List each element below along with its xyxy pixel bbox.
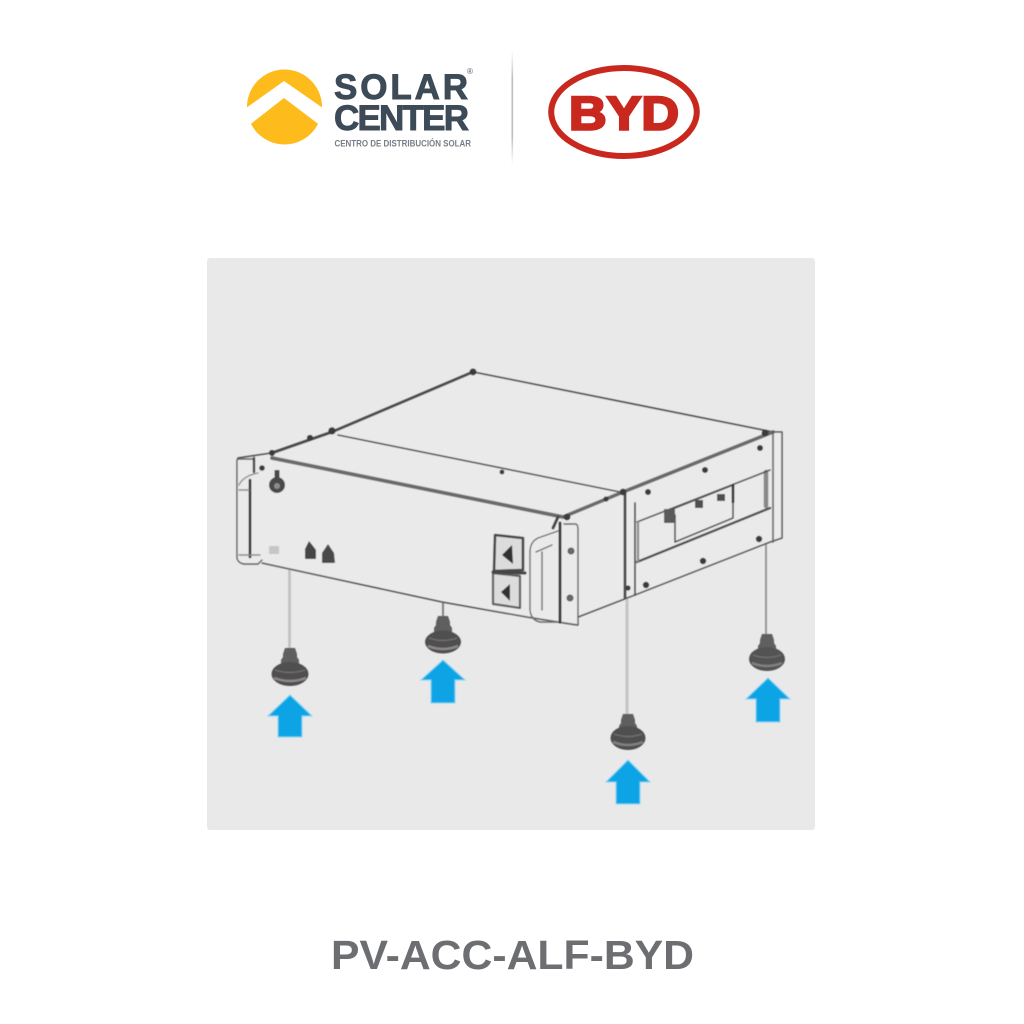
left handle (237, 458, 262, 564)
arrow 1 (268, 695, 312, 737)
foot 2 (425, 616, 461, 654)
red oval (551, 68, 697, 156)
illustration: battery module (237, 369, 782, 715)
arrow 2 (421, 660, 465, 703)
product code: PV-ACC-ALF-BYD (331, 932, 694, 978)
registered mark: ® (467, 67, 473, 76)
foot 3 (610, 714, 646, 750)
right handle (530, 523, 560, 622)
status label and ports (269, 541, 335, 563)
wordmark: SOLAR: SOLAR (334, 68, 468, 107)
fastening screws (259, 369, 768, 591)
logo: Solar Center (244, 67, 473, 148)
logo: BYD (551, 68, 697, 156)
tagline: CENTRO DE DISTRIBUCIÓN SOLAR (334, 138, 471, 148)
panel background (207, 258, 815, 830)
round connector (269, 470, 285, 493)
box body (237, 372, 782, 625)
arrow 4 (746, 678, 790, 722)
wordmark: CENTER: CENTER (334, 99, 469, 138)
power sockets (493, 535, 525, 608)
side panel uprights (625, 436, 773, 598)
logo divider (512, 50, 513, 165)
box bottom edges (262, 432, 782, 625)
icon: sun with roof chevron (244, 70, 325, 144)
arrow 3 (606, 760, 650, 804)
box top edges (238, 372, 773, 517)
panel: product illustration (207, 258, 815, 830)
corner bracket (553, 517, 578, 625)
BYD letters: BYD (569, 86, 679, 140)
side recess and display (637, 470, 770, 562)
foot 4 (749, 634, 785, 671)
guide rods (290, 542, 766, 715)
foot 1 (272, 648, 308, 686)
